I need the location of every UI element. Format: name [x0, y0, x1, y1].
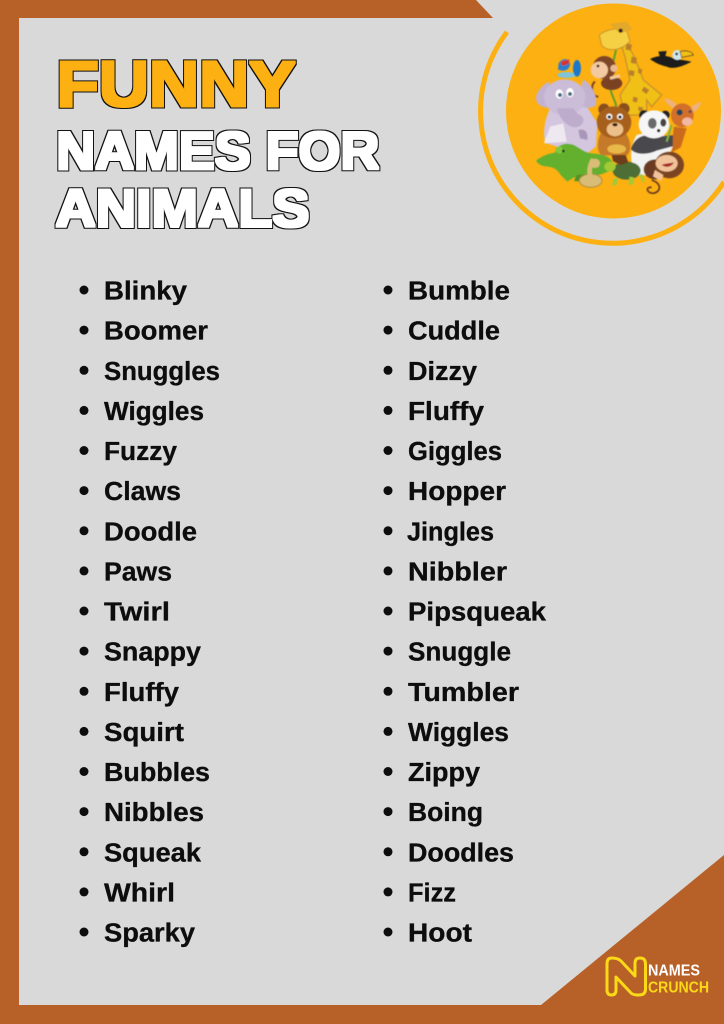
- name: Boomer: Boomer: [104, 318, 208, 346]
- name: Hoot: Hoot: [408, 920, 473, 948]
- logo icon: N mark: [607, 958, 646, 995]
- illustration: group of cartoon animals: [536, 22, 701, 193]
- monkey on vine: [591, 56, 622, 97]
- name: Fluffy: Fluffy: [104, 679, 180, 707]
- title line: ANIMALS: ANIMALS: [56, 180, 310, 238]
- name: Wiggles: Wiggles: [104, 398, 204, 426]
- name: Tumbler: Tumbler: [408, 679, 519, 707]
- name: Sparky: Sparky: [104, 920, 196, 948]
- giraffe: [599, 22, 662, 115]
- name: Squeak: Squeak: [104, 839, 202, 867]
- name: Blinky: Blinky: [104, 278, 188, 306]
- bear: [597, 103, 631, 155]
- vine: [610, 50, 616, 110]
- name: Bumble: Bumble: [408, 278, 510, 306]
- name: Snuggle: Snuggle: [408, 639, 511, 667]
- name: Claws: Claws: [104, 478, 181, 506]
- name: Snuggles: Snuggles: [104, 358, 220, 386]
- snake: [579, 159, 602, 187]
- name: Whirl: Whirl: [104, 879, 175, 907]
- name: Fluffy: Fluffy: [408, 398, 485, 426]
- name: Pipsqueak: Pipsqueak: [408, 598, 547, 626]
- crocodile: [536, 144, 613, 182]
- name: Paws: Paws: [104, 558, 172, 586]
- name: Dizzy: [384, 358, 478, 386]
- deer: [664, 98, 701, 153]
- name: Boing: Boing: [408, 799, 483, 827]
- name: Wiggles: Wiggles: [408, 719, 509, 747]
- turtle: [604, 155, 645, 186]
- title line: NAMES FOR: NAMES FOR: [56, 122, 379, 181]
- toucan: [650, 50, 693, 68]
- column 1: name list: [80, 278, 220, 948]
- name: Jingles: Jingles: [407, 518, 494, 546]
- name: Fluffy: [384, 398, 485, 426]
- column 2: name list: [384, 278, 547, 948]
- laughing monkey: [644, 152, 684, 193]
- name: Fuzzy: Fuzzy: [104, 438, 178, 466]
- logo text: CRUNCH: CRUNCH: [648, 980, 709, 996]
- name: Giggles: Giggles: [408, 438, 502, 466]
- name: Nibbles: Nibbles: [104, 799, 204, 827]
- name: Hopper: Hopper: [408, 478, 506, 506]
- name: Dizzy: Dizzy: [408, 358, 478, 386]
- title line: FUNNY: FUNNY: [56, 48, 296, 120]
- logo: NamesCrunch: [607, 958, 709, 996]
- name: Snappy: Snappy: [104, 639, 202, 667]
- name: Fizz: [384, 879, 456, 907]
- name: Cuddle: Cuddle: [408, 318, 500, 346]
- panda: [631, 110, 676, 175]
- name: Doodles: Doodles: [408, 839, 514, 867]
- elephant: [536, 79, 597, 155]
- name: Nibbler: Nibbler: [408, 558, 507, 586]
- name: Zippy: [384, 759, 481, 787]
- name: Fluffy: [80, 679, 180, 707]
- illustration circle: [506, 4, 721, 218]
- parrot: [557, 59, 581, 78]
- decorative ring around illustration: [481, 32, 724, 243]
- name: Zippy: Zippy: [408, 759, 481, 787]
- name: Doodle: Doodle: [104, 518, 197, 546]
- name: Squirt: Squirt: [104, 719, 185, 747]
- name: Whirl: [80, 879, 175, 907]
- name: Twirl: [80, 598, 170, 626]
- name: Twirl: Twirl: [104, 598, 170, 626]
- name: Hoot: [384, 920, 473, 948]
- name: Bubbles: Bubbles: [104, 759, 210, 787]
- logo text: NAMES: NAMES: [648, 962, 700, 980]
- title: [56, 48, 379, 238]
- name: Fizz: Fizz: [408, 879, 456, 907]
